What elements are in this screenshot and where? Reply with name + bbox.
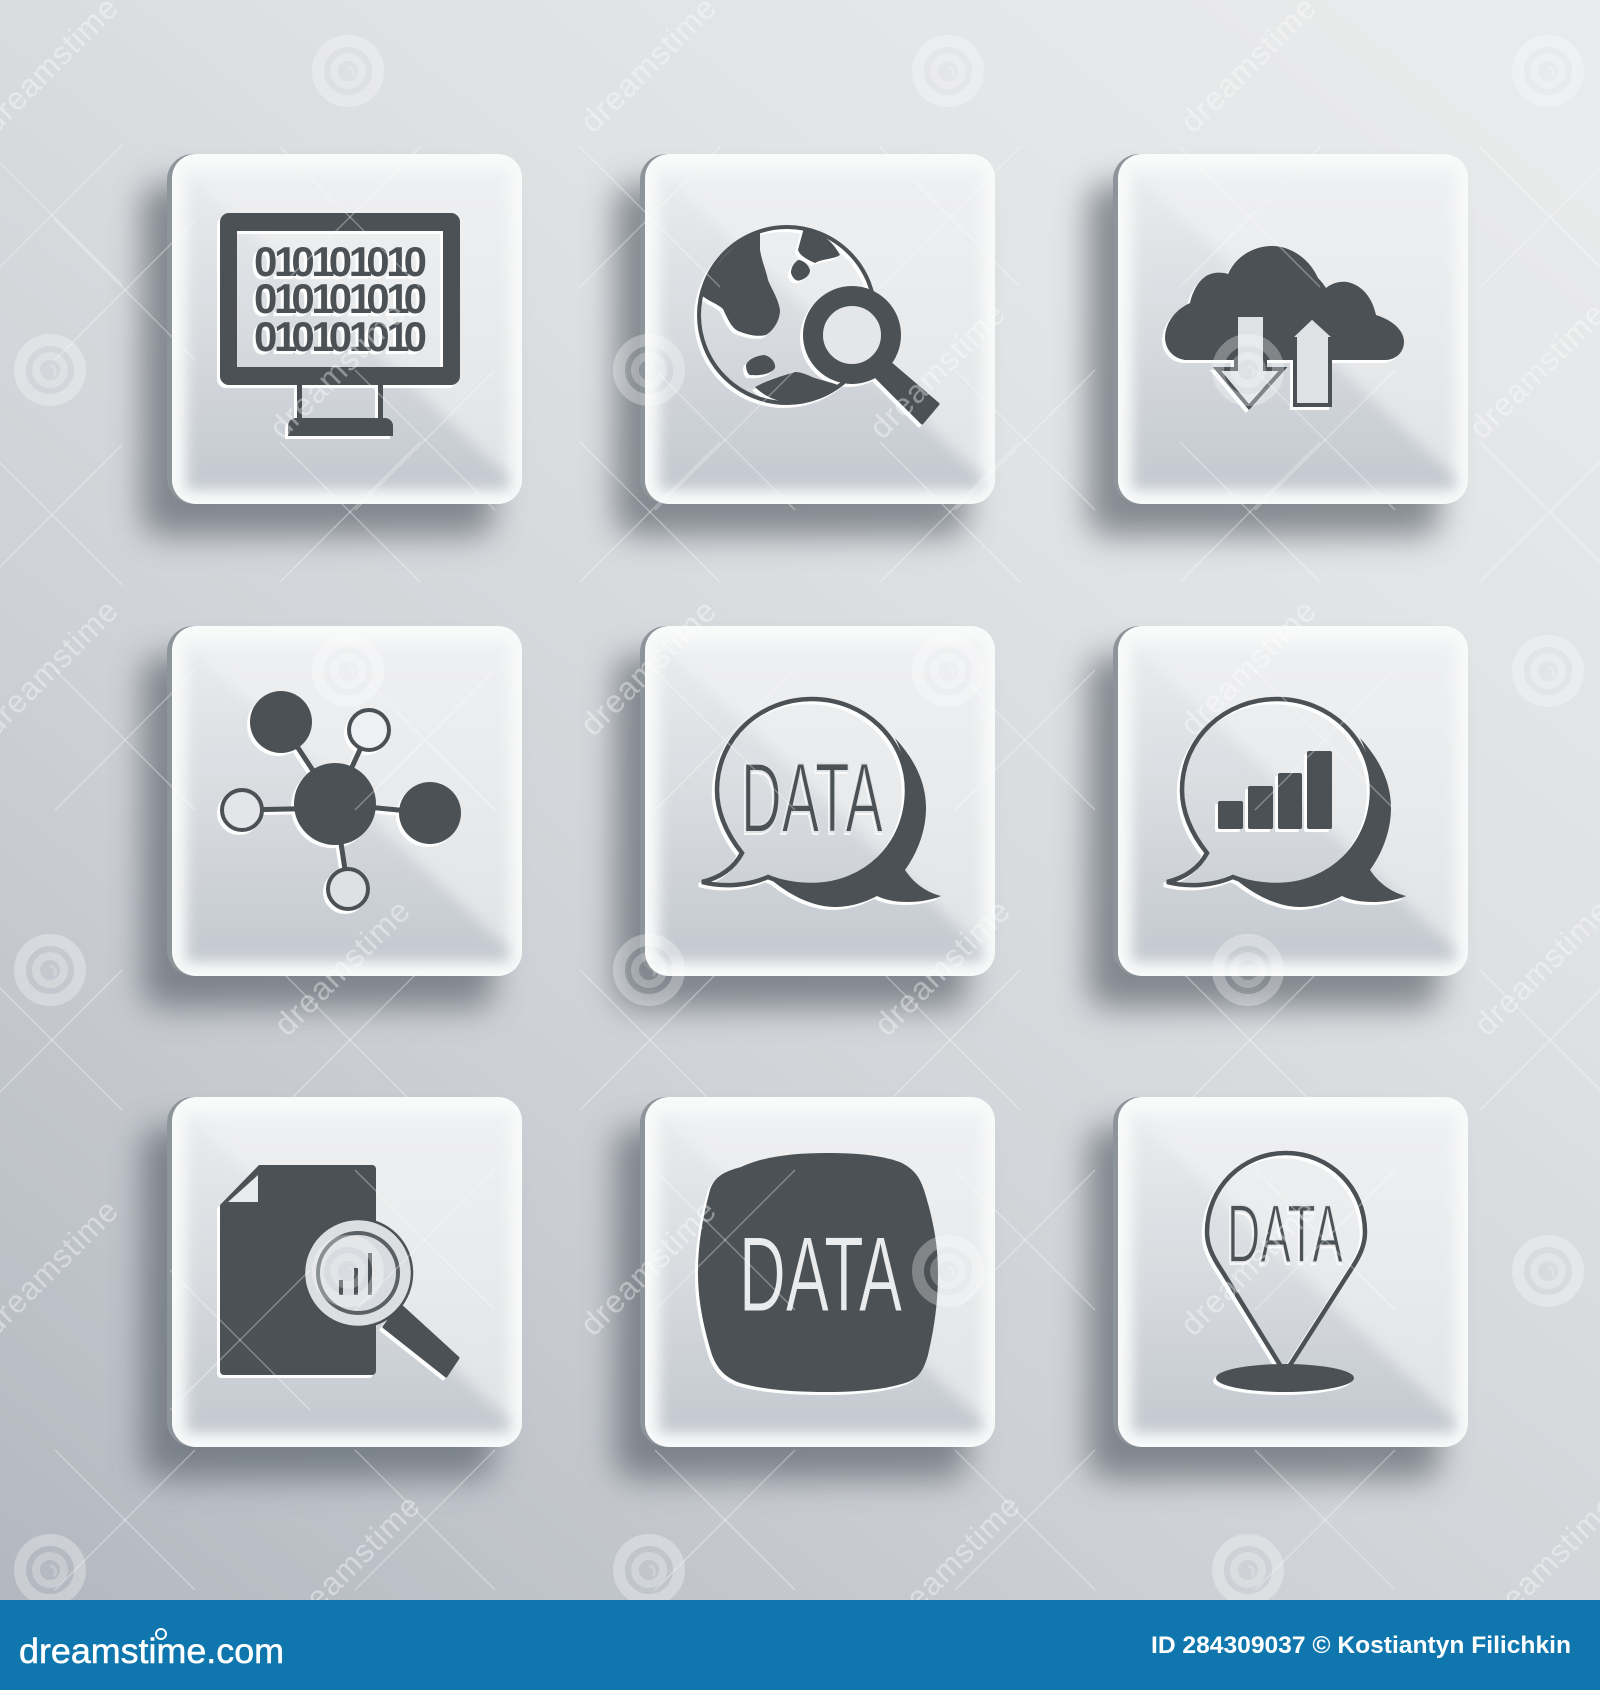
icon: connected nodes <box>222 691 461 909</box>
panel: network molecule <box>142 626 522 1008</box>
label: DATA: DATA <box>1227 1187 1343 1280</box>
watermark overlay: dreamstime <box>877 1487 1028 1638</box>
footer bar <box>0 1600 1600 1690</box>
card <box>1088 626 1468 1008</box>
watermark overlay: dreamstime <box>1173 592 1324 743</box>
panel: data location pin <box>1088 1097 1468 1479</box>
panel: bar chart speech bubble <box>1088 626 1468 1008</box>
icon: document with magnifier and chart <box>220 1165 458 1376</box>
panel: globe search <box>615 154 995 536</box>
watermark overlay: dreamstime <box>262 295 413 446</box>
panel: data speech bubble <box>615 626 995 1008</box>
card <box>142 626 522 1008</box>
icon: computer monitor with binary code <box>220 213 460 436</box>
label: DATA: DATA <box>739 1214 902 1334</box>
icon: computer monitor with binary code: 010101010 <box>254 313 427 360</box>
panel: binary monitor <box>142 154 522 536</box>
panel: document search <box>142 1097 522 1479</box>
card <box>142 1097 522 1479</box>
logo: dreamstime.com: dreamstime.com <box>19 1632 284 1671</box>
card <box>615 1097 995 1479</box>
icon: cloud with up and down arrows <box>1165 246 1404 407</box>
credit: image id and author: ID 284309037 © Kostiantyn Filichkin <box>1151 1632 1571 1659</box>
watermark overlay: dreamstime <box>862 295 1013 446</box>
icon: globe with magnifying glass <box>699 227 938 423</box>
icon: map pin on ellipse <box>1207 1153 1365 1392</box>
panel: data blob <box>615 1097 995 1479</box>
icon: computer monitor with binary code: 010101010 <box>254 275 427 322</box>
icon: speech bubble with DATA <box>702 699 941 907</box>
watermark overlay: dreamstime <box>867 892 1018 1043</box>
watermark overlay: dreamstime <box>277 1487 428 1638</box>
card <box>1088 1097 1468 1479</box>
watermark overlay: dreamstime <box>267 892 418 1043</box>
icon: computer monitor with binary code: 010101010 <box>254 238 427 285</box>
icon: rounded DATA badge <box>698 1153 938 1392</box>
watermark overlay: dreamstime <box>573 592 724 743</box>
card <box>142 154 522 536</box>
watermark overlay: dreamstime <box>573 1192 724 1343</box>
card <box>1088 154 1468 536</box>
label: DATA: DATA <box>741 742 883 853</box>
card <box>615 154 995 536</box>
panel: cloud sync <box>1088 154 1468 536</box>
watermark overlay: dreamstime <box>1173 1192 1324 1343</box>
icon: speech bubble with bars <box>1167 699 1406 907</box>
card <box>615 626 995 1008</box>
